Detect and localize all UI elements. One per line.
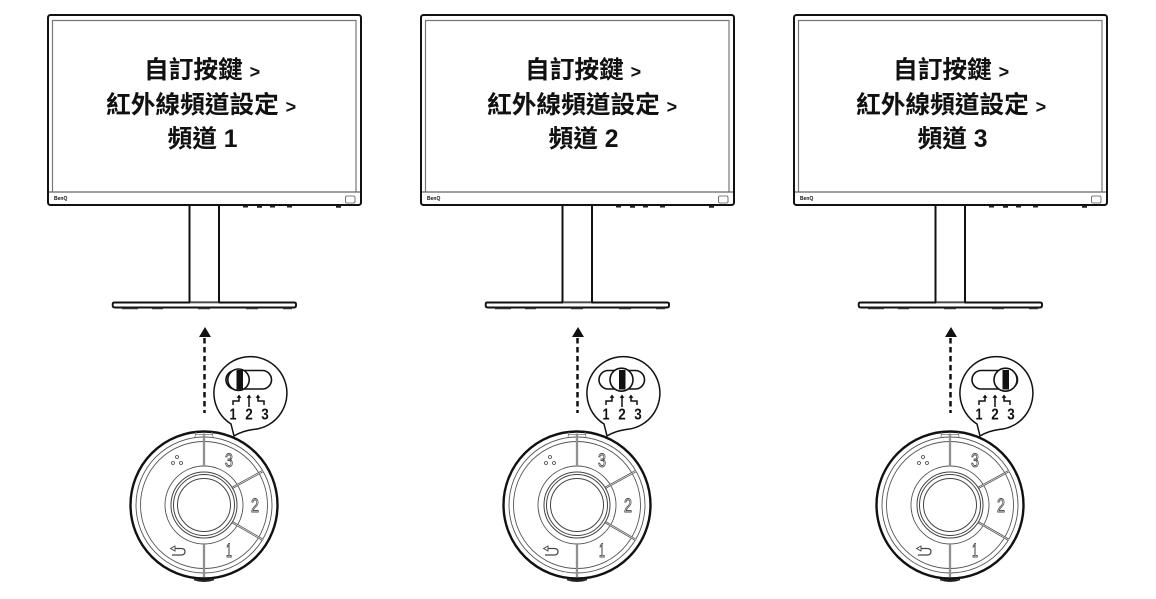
panel: channel 1 bbox=[48, 15, 361, 581]
on-screen menu path 3: 紅外線頻道設定 > bbox=[856, 91, 1046, 119]
callout: switch at position 1: 3 bbox=[261, 406, 269, 424]
on-screen menu path 1: 自訂按鍵 > bbox=[144, 56, 260, 84]
callout: switch at position 3 bbox=[960, 357, 1033, 436]
callout: switch at position 2 bbox=[587, 357, 660, 436]
remote dial 3: 2 bbox=[997, 496, 1005, 517]
remote dial 2 bbox=[504, 432, 650, 581]
monitor 1 bbox=[48, 15, 361, 308]
on-screen menu path 1 bbox=[106, 56, 296, 153]
monitor 3 logo: BenQ bbox=[800, 196, 813, 202]
on-screen menu path 1: 頻道 1 bbox=[168, 125, 238, 153]
remote dial 3: 3 bbox=[971, 451, 979, 472]
callout: switch at position 2: 3 bbox=[634, 406, 642, 424]
on-screen menu path 3: 頻道 3 bbox=[918, 125, 987, 153]
panel: channel 2 bbox=[421, 15, 734, 581]
on-screen menu path 1: 紅外線頻道設定 > bbox=[106, 91, 296, 119]
monitor 2 logo: BenQ bbox=[427, 196, 440, 202]
callout: switch at position 2: 1 bbox=[602, 406, 610, 424]
callout: switch at position 2: 2 bbox=[618, 406, 626, 424]
monitor 2 bbox=[421, 15, 734, 308]
on-screen menu path 2: 紅外線頻道設定 > bbox=[487, 91, 677, 119]
callout: switch at position 3: 3 bbox=[1007, 406, 1015, 424]
callout: switch at position 1: 2 bbox=[245, 406, 253, 424]
remote dial 1: 3 bbox=[225, 451, 233, 472]
remote dial 2: 2 bbox=[624, 496, 632, 517]
arrow: signal direction 1 bbox=[199, 327, 211, 413]
on-screen menu path 3: 自訂按鍵 > bbox=[893, 56, 1009, 84]
remote dial 3 bbox=[876, 432, 1024, 581]
on-screen menu path 2: 頻道 2 bbox=[548, 125, 618, 153]
arrow: signal direction 2 bbox=[572, 327, 584, 413]
remote dial 1: 1 bbox=[226, 541, 232, 562]
callout: switch at position 3: 1 bbox=[976, 406, 983, 424]
remote dial 3: 1 bbox=[972, 541, 978, 562]
on-screen menu path 2 bbox=[487, 56, 677, 153]
arrow: signal direction 3 bbox=[945, 327, 957, 413]
remote dial 2: 1 bbox=[599, 541, 605, 562]
on-screen menu path 3 bbox=[856, 56, 1046, 153]
panel: channel 3 bbox=[794, 15, 1107, 581]
callout: switch at position 1: 1 bbox=[230, 406, 237, 424]
monitor 1 logo: BenQ bbox=[54, 196, 67, 202]
callout: switch at position 1 bbox=[214, 357, 287, 436]
on-screen menu path 2: 自訂按鍵 > bbox=[525, 56, 641, 84]
remote dial 1 bbox=[130, 432, 278, 581]
monitor 3 bbox=[794, 15, 1107, 308]
remote dial 1: 2 bbox=[251, 496, 259, 517]
callout: switch at position 3: 2 bbox=[991, 406, 999, 424]
remote dial 2: 3 bbox=[598, 451, 606, 472]
